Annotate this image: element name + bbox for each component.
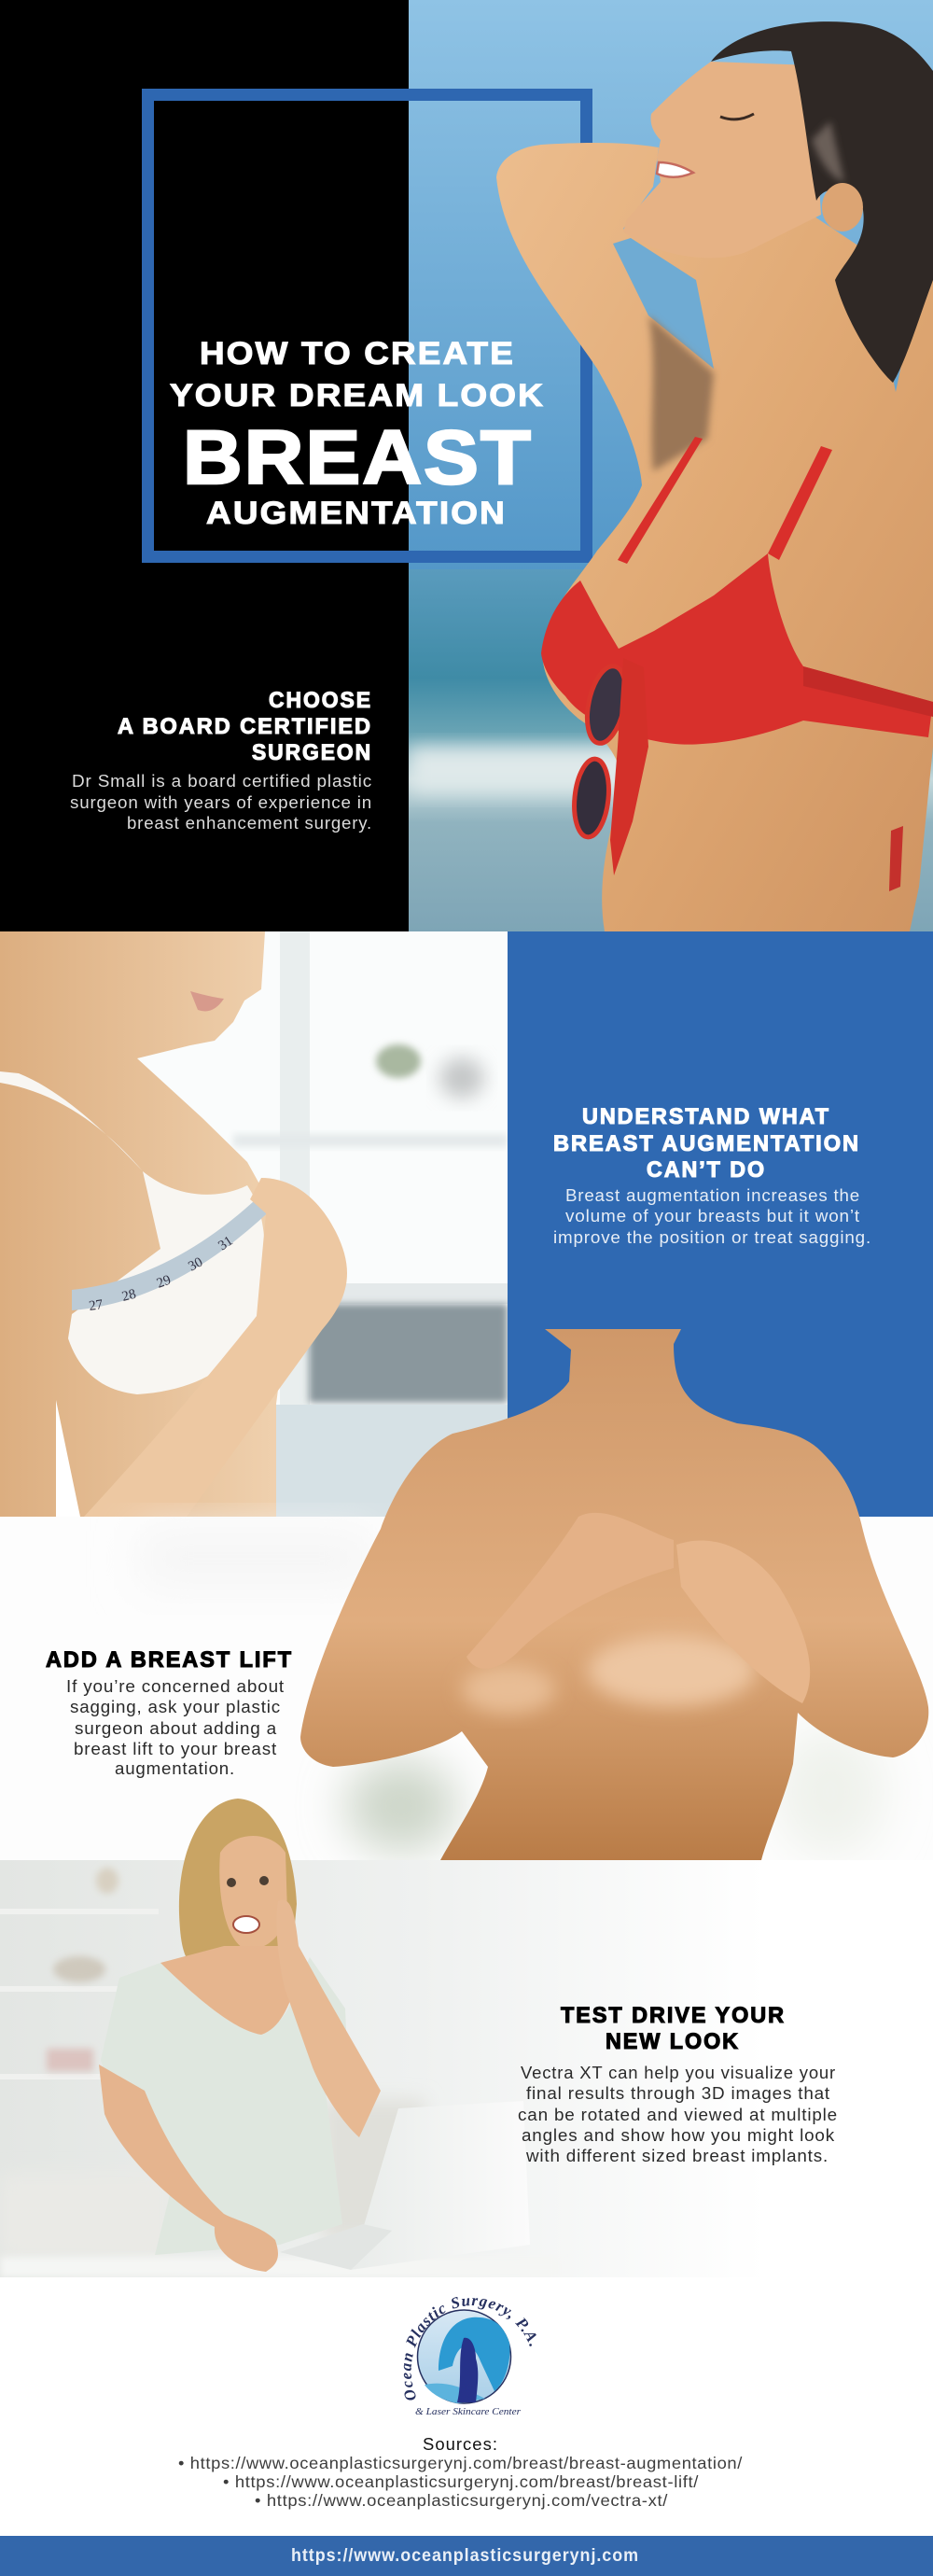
sources: • https://www.oceanplasticsurgerynj.com/breast/breast-lift/	[223, 2472, 699, 2491]
panel: hero black column	[0, 0, 409, 931]
text block: choose a board certified surgeon	[70, 688, 372, 833]
panel: room with laptop background	[0, 1860, 592, 2277]
photo: woman measuring with a tape	[0, 931, 508, 1517]
text block: test drive your new look: TEST DRIVE YOUR	[561, 2003, 786, 2028]
text block: choose a board certified surgeon: surgeon with years of experience in	[70, 792, 372, 812]
text block: understand: volume of your breasts but it won’t	[565, 1206, 860, 1225]
text block: test drive your new look: angles and show how you might look	[522, 2125, 835, 2145]
sources: Sources:	[423, 2435, 498, 2454]
text block: understand: BREAST AUGMENTATION	[553, 1131, 860, 1156]
text block: test drive your new look	[518, 2003, 838, 2165]
photo: surprised woman at a laptop	[99, 1799, 429, 2272]
text block: test drive your new look: NEW LOOK	[606, 2029, 740, 2054]
text block: choose a board certified surgeon: breast enhancement surgery.	[127, 813, 372, 833]
footer bar: https://www.oceanplasticsurgerynj.com	[291, 2546, 639, 2566]
photo: woman measuring with a tape: 27	[88, 1297, 104, 1314]
title: AUGMENTATION	[206, 496, 507, 531]
panel: understand what breast augmentation can't do	[508, 931, 933, 1517]
photo: woman measuring with a tape: 28	[120, 1287, 138, 1305]
photo: woman in red bikini on the beach	[496, 21, 933, 931]
text block: test drive your new look: can be rotated and viewed at multiple	[518, 2105, 838, 2124]
text block: choose a board certified surgeon: A BOARD CERTIFIED	[118, 714, 372, 739]
text block: understand: CAN’T DO	[647, 1157, 766, 1183]
title	[170, 336, 545, 531]
sources	[178, 2435, 743, 2510]
text block: add a breast lift: augmentation.	[115, 1758, 235, 1778]
text block: understand: UNDERSTAND WHAT	[582, 1104, 830, 1129]
text block: choose a board certified surgeon: CHOOSE	[269, 688, 372, 713]
title: HOW TO CREATE	[200, 336, 515, 371]
text block: choose a board certified surgeon: Dr Small is a board certified plastic	[72, 771, 372, 791]
text block: understand: improve the position or treat sagging.	[553, 1227, 871, 1247]
title: YOUR DREAM LOOK	[170, 378, 545, 413]
text block: add a breast lift: breast lift to your breast	[74, 1739, 277, 1758]
text block: test drive your new look: Vectra XT can help you visualize your	[521, 2063, 836, 2082]
photo: woman measuring with a tape: 31	[216, 1234, 236, 1253]
title frame	[147, 95, 586, 556]
photo: woman measuring with a tape: 29	[155, 1273, 173, 1292]
text block: test drive your new look: final results through 3D images that	[526, 2083, 830, 2103]
photo: beach background	[409, 0, 933, 931]
footer bar	[0, 2536, 933, 2576]
sources: • https://www.oceanplasticsurgerynj.com/breast/breast-augmentation/	[178, 2454, 743, 2472]
logo: Ocean Plastic Surgery: Ocean Plastic Surgery, P.A.	[403, 2297, 536, 2401]
text block: understand	[553, 1104, 871, 1247]
title: BREAST	[183, 415, 533, 500]
text block: add a breast lift: If you’re concerned about	[66, 1676, 285, 1696]
text block: add a breast lift	[46, 1647, 293, 1778]
logo: Ocean Plastic Surgery: & Laser Skincare Center	[415, 2406, 522, 2417]
text block: add a breast lift: ADD A BREAST LIFT	[46, 1647, 293, 1673]
photo: woman measuring with a tape: 30	[186, 1254, 205, 1275]
text block: choose a board certified surgeon: SURGEON	[252, 740, 372, 765]
text block: test drive your new look: with different sized breast implants.	[525, 2146, 829, 2165]
text block: add a breast lift: sagging, ask your plastic	[70, 1697, 281, 1716]
photo: woman with arms crossed over chest	[300, 1329, 928, 1860]
text block: understand: Breast augmentation increases the	[565, 1185, 860, 1205]
text block: add a breast lift: surgeon about adding a	[75, 1718, 277, 1738]
photo: blurred room background	[133, 1503, 891, 1860]
sources: • https://www.oceanplasticsurgerynj.com/vectra-xt/	[255, 2491, 668, 2510]
